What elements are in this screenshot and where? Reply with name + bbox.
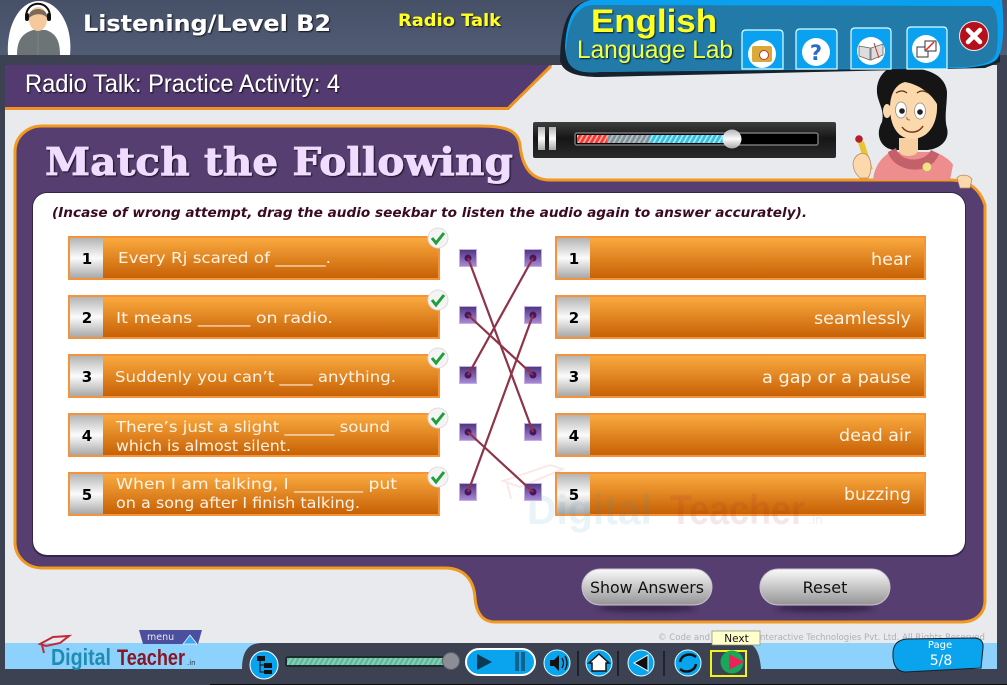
Digital Teacher logo: Teacher [117,645,185,670]
right item 4: 4 [569,427,579,445]
left item 4: There’s just a slight ______ sound [115,418,390,437]
right item 3 [556,355,925,397]
left item 3 [69,355,439,397]
check marks [428,228,448,487]
icon: home [586,650,612,676]
right item 5: buzzing [844,485,911,505]
left item 4 [69,414,439,456]
left item 1 [69,237,439,279]
right item 4 [556,414,925,456]
button: Show Answers [582,569,712,612]
left item 1: 1 [82,250,92,268]
right item 4: dead air [839,426,911,446]
left item 4: 4 [82,427,92,445]
page indicator: 5/8 [930,653,952,669]
icon: sound [544,650,570,676]
page indicator: Page [928,640,952,651]
watermark logo: Teacher [670,486,805,533]
left item 5: When I am talking, I ________ put [116,475,397,494]
button: next highlighted [711,650,746,676]
character: teacher girl [853,68,972,188]
right item 2: seamlessly [814,309,911,329]
left item 5 [69,473,439,515]
button: Show Answers: Show Answers [590,578,704,597]
bottom navigation bar [242,643,761,679]
play and pause pill [466,649,535,675]
white matching panel [32,192,966,557]
header logo banner [560,0,1003,77]
header title: Listening/Level B2 [83,12,331,37]
logo words Language Lab: Language Lab [577,36,733,64]
left item 1: Every Rj scared of ______. [118,249,331,268]
icon tab: book [851,28,891,69]
copyright note: © Code and Pedagogy Interactive Technologies Pvt. Ltd. All Rights Reserved [658,633,985,643]
watermark logo: Digital [527,486,652,533]
Digital Teacher logo [40,636,196,670]
left item 5: on a song after I finish talking. [116,494,360,512]
right item 5 [556,473,925,515]
menu tab: menu [147,632,174,643]
left item 4: which is almost silent. [116,437,291,455]
icon tab: window [907,27,947,69]
left item 3: 3 [82,368,92,386]
icon tab: help: ? [810,41,822,65]
right item 2: 2 [569,309,579,327]
right item 5: 5 [569,486,579,504]
top header bar [0,0,1007,55]
avatar: listener with headphones [8,1,70,55]
right item 1 [556,237,925,279]
left item 2 [69,296,439,338]
instruction text: (Incase of wrong attempt, drag the audio seekbar to listen the audio again to answer accurately). [52,206,807,221]
header topic: Radio Talk [398,11,502,31]
progress track [285,652,460,670]
icon: tree menu [250,651,278,679]
Digital Teacher logo: Digital [51,644,111,670]
close button [960,22,988,50]
activity heading: Radio Talk: Practice Activity: 4 [25,70,340,98]
right item 1: hear [871,250,911,270]
logo word English: English [591,3,717,39]
tooltip: Next: Next [724,633,749,645]
right item 3: 3 [569,368,579,386]
Digital Teacher logo: .in [187,659,196,667]
bottom strip [5,643,997,669]
button: Reset: Reset [803,578,847,597]
left item 3: Suddenly you can’t ____ anything. [115,368,396,387]
icon: back [628,650,654,676]
icon tab: help [796,29,837,69]
icon tab: folder [742,30,783,69]
tooltip: Next [712,631,760,645]
activity banner [5,65,552,108]
right item 3: a gap or a pause [762,368,911,388]
menu tab [139,630,202,644]
left item 5: 5 [82,486,92,504]
audio player [533,122,836,158]
left item 2: It means ______ on radio. [116,309,333,328]
watermark logo: .in [808,513,823,527]
right item 1: 1 [569,250,579,268]
icon: refresh [675,650,701,676]
watermark logo [503,465,823,533]
right item 2 [556,296,925,338]
connector nodes [460,250,542,500]
connector lines [468,258,533,492]
heading: Match the Following: Match the Following [45,139,513,184]
left item 2: 2 [82,309,92,327]
button: Reset [760,569,890,612]
main purple panel [15,126,985,622]
page indicator [893,638,983,672]
